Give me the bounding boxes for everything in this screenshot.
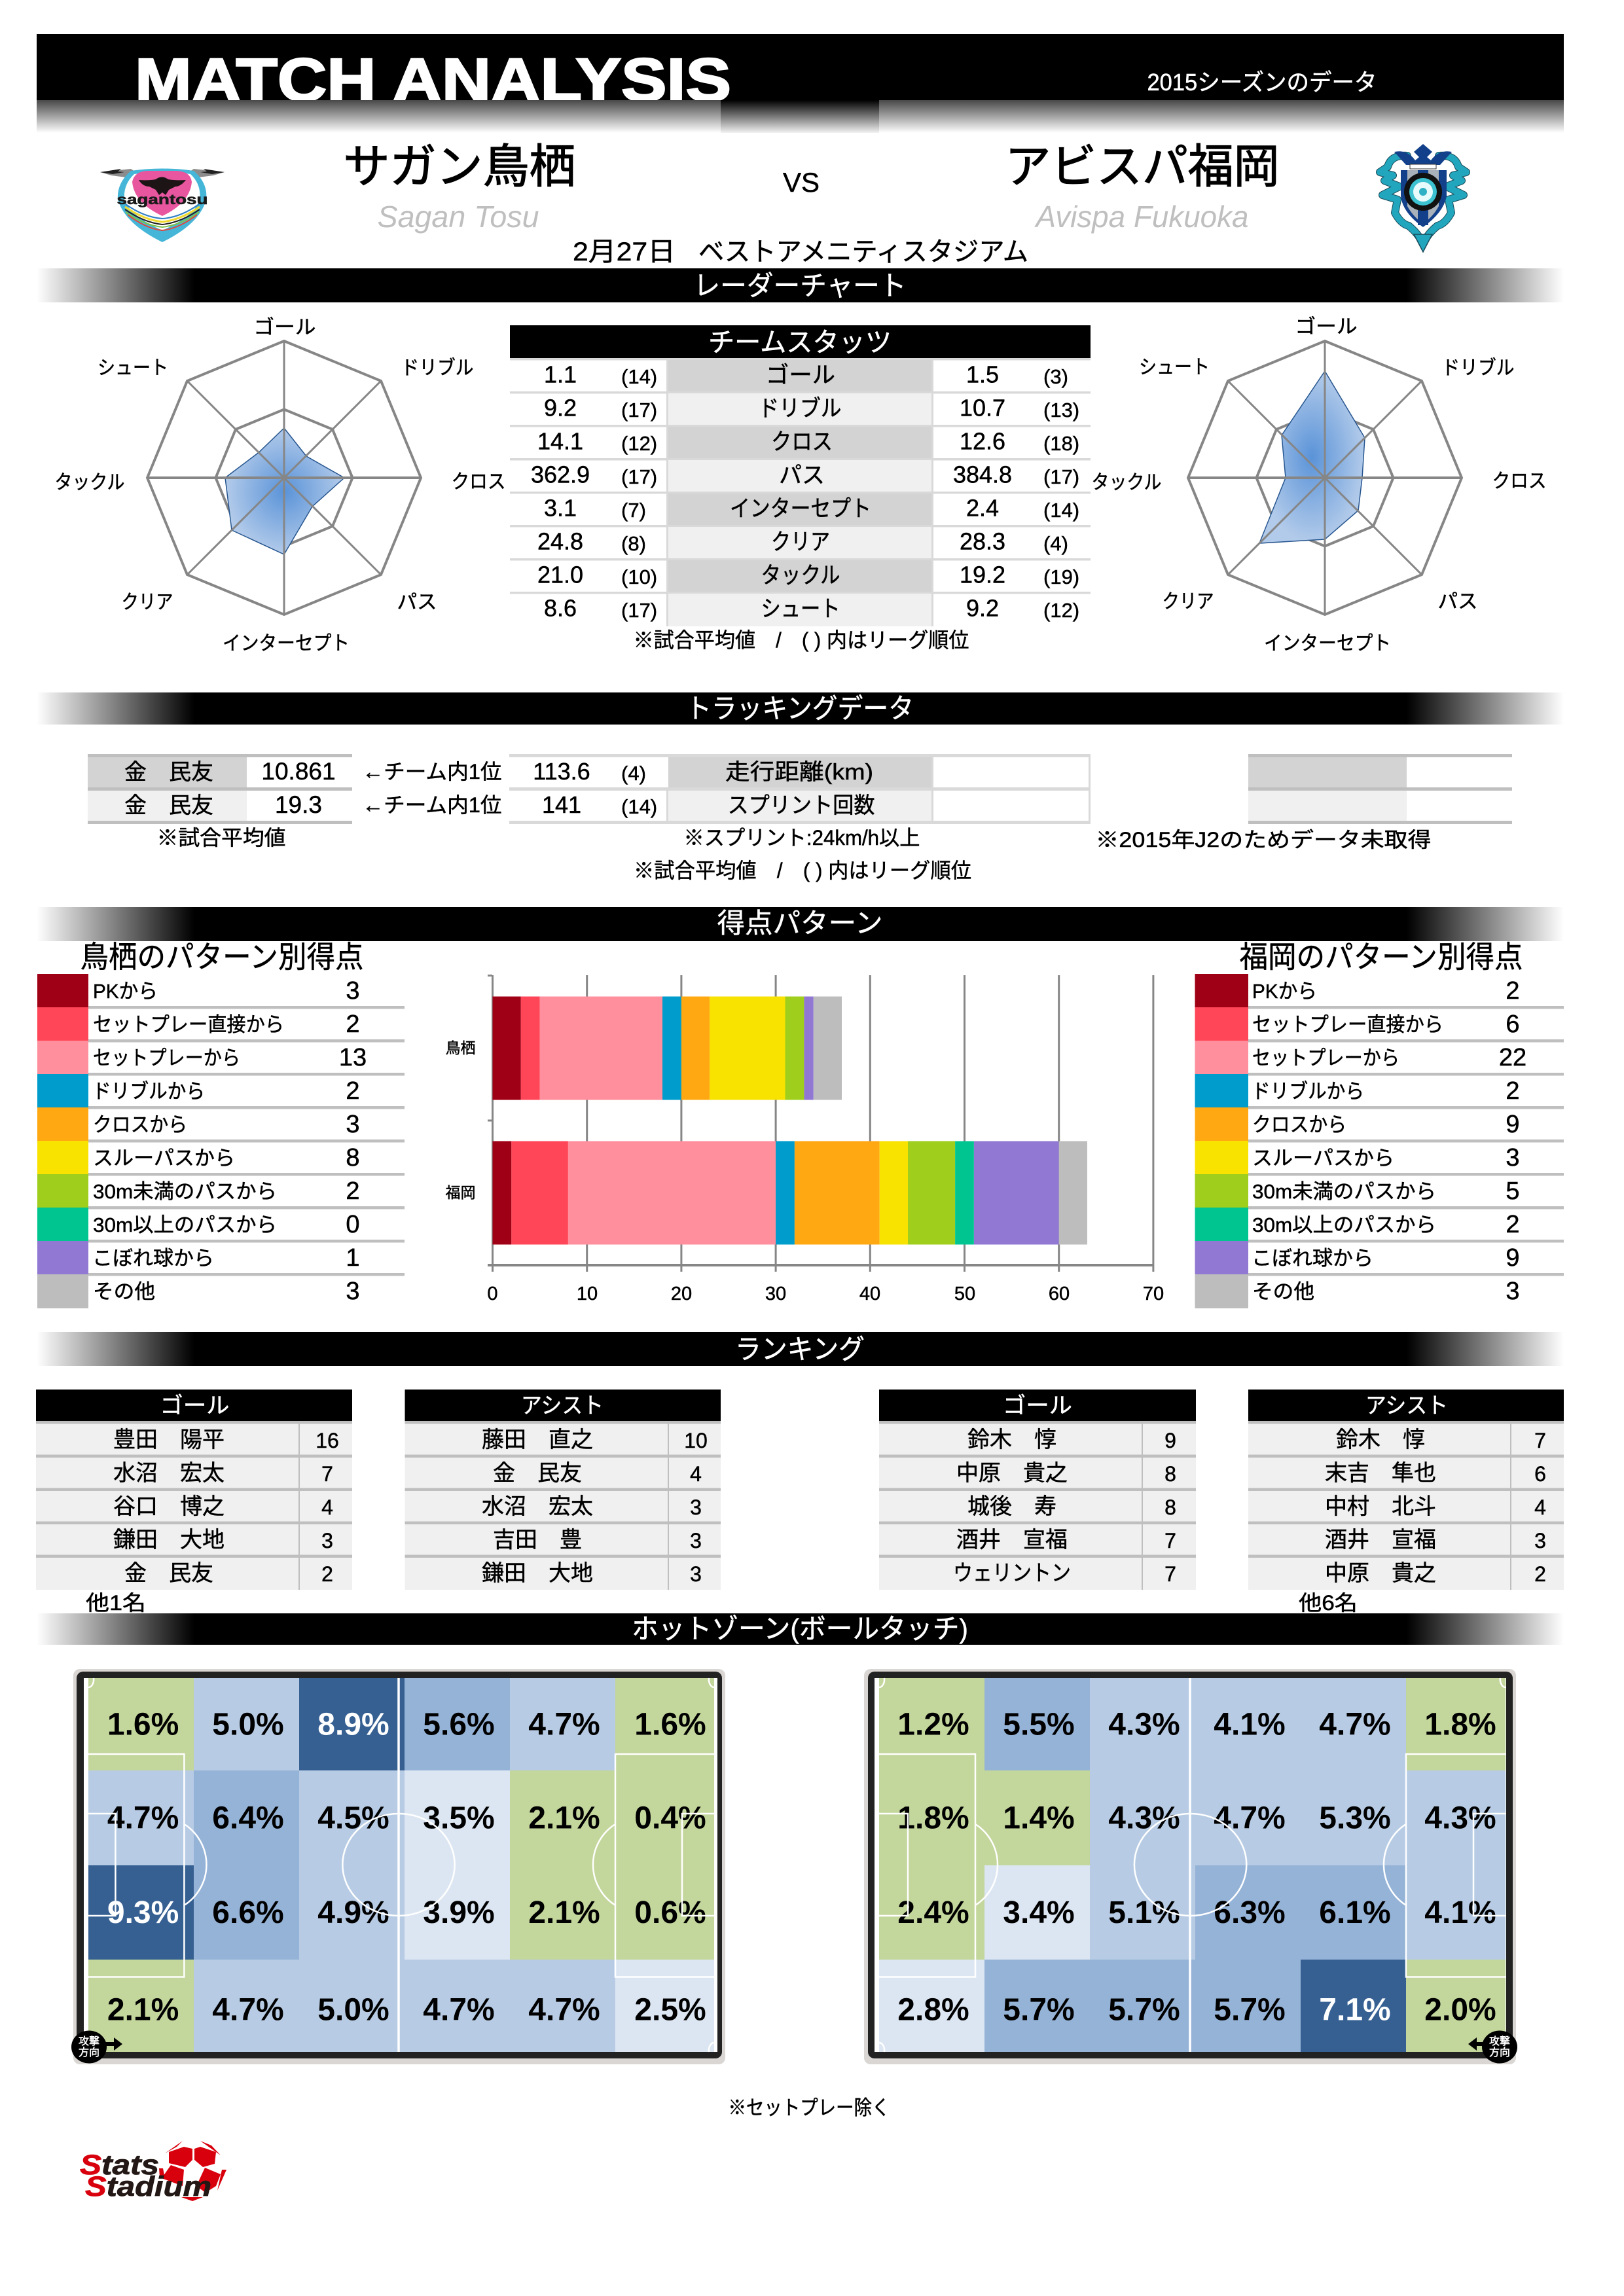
zone percentages: 1.8% xyxy=(897,1801,969,1836)
Fukuoka values: 19.2 xyxy=(960,562,1005,588)
Tosu values: 21.0 xyxy=(537,562,583,588)
legend table: Fukuoka: セットプレーから xyxy=(1252,1047,1399,1069)
zone percentages: 4.7% xyxy=(212,1992,284,2027)
tracking: team table: 141 xyxy=(542,791,581,818)
Fukuoka ranks: (17) xyxy=(1043,465,1079,488)
Fukuoka values: 1.5 xyxy=(966,361,999,387)
ranking table: Fukuoka assists xyxy=(1248,1390,1564,1590)
zone percentages: 4.7% xyxy=(528,1708,600,1742)
team name: Sagan Tosu: サガン鳥栖 xyxy=(343,141,576,193)
legend table: Fukuoka: 6 xyxy=(1506,1011,1520,1038)
ranking table: Fukuoka assists: 酒井 宣福 xyxy=(1325,1528,1436,1552)
legend table: Tosu: 8 xyxy=(346,1144,360,1172)
logo: Stats Stadium xyxy=(80,2141,226,2202)
tracking footnotes: ※2015年J2のためデータ未取得 xyxy=(1096,828,1431,852)
ranking table: Fukuoka goals: 9 xyxy=(1164,1429,1176,1452)
legend table: Fukuoka: 9 xyxy=(1506,1244,1520,1272)
zone percentages: 0.6% xyxy=(634,1895,706,1930)
tracking footnotes: ※スプリント:24km/h以上 xyxy=(683,826,920,850)
legend table: Tosu: 2 xyxy=(346,1177,360,1205)
zone percentages xyxy=(107,1708,706,2027)
legend table: Fukuoka: 30m以上のパスから xyxy=(1252,1213,1436,1236)
legend table: Tosu: セットプレーから xyxy=(93,1047,240,1069)
Fukuoka values: 10.7 xyxy=(960,394,1005,422)
ranking table: Fukuoka assists: 2 xyxy=(1534,1562,1546,1586)
Tosu ranks xyxy=(621,365,657,622)
data polygon xyxy=(1259,371,1365,543)
ranking table: Tosu goals: ゴール xyxy=(160,1393,229,1418)
Tosu ranks: (17) xyxy=(621,465,657,488)
ranking table: Tosu assists: 吉田 豊 xyxy=(493,1528,582,1552)
ranking table: Tosu assists: 藤田 直之 xyxy=(482,1427,593,1452)
zone percentages: 5.5% xyxy=(1003,1708,1075,1742)
Tosu ranks: (17) xyxy=(621,599,657,622)
ranking note: Tosu: 他1名 xyxy=(86,1591,146,1615)
Tosu ranks: (12) xyxy=(621,432,657,455)
bar labels xyxy=(445,1039,475,1201)
ranking table: Fukuoka goals: 8 xyxy=(1164,1462,1176,1486)
x axis labels: 0 xyxy=(487,1283,498,1304)
Fukuoka values: 2.4 xyxy=(966,495,999,521)
zone percentages: 4.7% xyxy=(528,1992,600,2027)
legend table: Tosu: 13 xyxy=(339,1044,367,1071)
Tosu values: 362.9 xyxy=(531,461,590,488)
ranking table: Tosu assists: 3 xyxy=(690,1562,702,1586)
zone percentages: 9.3% xyxy=(107,1895,179,1930)
match date and venue: 2月27日 xyxy=(573,238,676,266)
Fukuoka ranks: (18) xyxy=(1043,432,1079,455)
zone percentages: 4.3% xyxy=(1108,1801,1180,1836)
stat labels: ドリブル xyxy=(758,396,842,422)
hot zone pitch: Tosu xyxy=(71,1669,725,2064)
ranking table: Fukuoka goals: ゴール xyxy=(1003,1393,1072,1418)
zone percentages: 4.9% xyxy=(317,1895,389,1930)
logo: Sagan Tosu xyxy=(100,169,225,242)
team name: Sagan Tosu xyxy=(343,141,576,234)
zone percentages xyxy=(897,1708,1496,2027)
legend table: Tosu: 30m以上のパスから xyxy=(93,1213,277,1236)
legend table: Tosu: 3 xyxy=(346,1111,360,1138)
legend table: Fukuoka: こぼれ球から xyxy=(1252,1247,1373,1270)
Fukuoka values: 9.2 xyxy=(966,594,999,622)
tracking: team table: 113.6 xyxy=(533,758,590,785)
radar axis labels: ゴール xyxy=(254,317,316,338)
Tosu ranks: (14) xyxy=(621,365,657,388)
zone percentages: 4.7% xyxy=(1214,1801,1286,1836)
legend table: Fukuoka: ドリブルから xyxy=(1252,1080,1364,1103)
tracking: Tosu top player table: 19.3 xyxy=(275,791,322,818)
Fukuoka values: 12.6 xyxy=(960,428,1005,454)
attack direction badge xyxy=(71,2030,122,2063)
tracking footnotes: ※試合平均値 xyxy=(157,826,285,850)
tracking: team table: スプリント回数 xyxy=(728,793,875,818)
zone percentages: 5.0% xyxy=(212,1708,284,1742)
Tosu values xyxy=(531,361,590,622)
ranking table: Fukuoka assists: 6 xyxy=(1534,1462,1546,1486)
stat labels: ゴール xyxy=(766,363,835,388)
radar axis labels: ドリブル xyxy=(1441,357,1515,379)
stat labels: クロス xyxy=(771,429,833,455)
tracking: Tosu top player table xyxy=(88,754,352,824)
team stats footnote: ※試合平均値 / ( ) 内はリーグ順位 xyxy=(634,628,969,652)
Fukuoka ranks xyxy=(1043,365,1079,622)
zone percentages: 4.7% xyxy=(1319,1708,1391,1742)
radar axis labels: クロス xyxy=(452,471,505,493)
season label: 2015シーズンのデータ xyxy=(1147,69,1377,96)
x axis labels: 30 xyxy=(765,1283,786,1304)
Tosu ranks: (8) xyxy=(621,532,646,555)
legend table: Fukuoka: 2 xyxy=(1506,1211,1520,1238)
zone percentages: 2.5% xyxy=(634,1992,706,2027)
radar axis labels: パス xyxy=(397,592,437,613)
Fukuoka ranks: (3) xyxy=(1043,365,1068,388)
tracking: team table xyxy=(509,754,1091,824)
zone percentages: 2.1% xyxy=(528,1895,600,1930)
logo: Avispa Fukuoka xyxy=(1380,144,1466,252)
ranking table: Tosu assists xyxy=(405,1390,721,1590)
stat labels xyxy=(730,363,871,622)
legend table: Tosu: PKから xyxy=(93,980,158,1003)
radar axis labels: クリア xyxy=(122,592,173,613)
ranking table: Fukuoka goals: 中原 貴之 xyxy=(956,1461,1068,1486)
radar axis labels: ゴール xyxy=(1295,316,1358,338)
Tosu ranks: (10) xyxy=(621,565,657,588)
ranking table: Fukuoka goals: 城後 寿 xyxy=(967,1494,1056,1519)
ranking table: Tosu goals: 3 xyxy=(321,1529,333,1552)
ranking table: Tosu goals: 水沼 宏太 xyxy=(113,1461,225,1486)
zone percentages: 5.7% xyxy=(1214,1992,1286,2027)
tracking: Tosu top player table: 10.861 xyxy=(261,758,336,785)
radar chart: Fukuoka xyxy=(1092,316,1546,655)
bar labels: 福岡 xyxy=(445,1184,475,1201)
bar: Tosu xyxy=(492,996,842,1100)
legend table: Tosu: 0 xyxy=(346,1211,360,1238)
tracking: team rank notes: ←チーム内1位 xyxy=(363,760,501,783)
Tosu values: 8.6 xyxy=(544,594,577,622)
attack direction badge: 方向 xyxy=(1489,2047,1510,2058)
tracking footnotes: ※試合平均値 / ( ) 内はリーグ順位 xyxy=(634,859,971,882)
ranking table: Tosu goals: 谷口 博之 xyxy=(113,1494,225,1519)
legend table: Fukuoka: 2 xyxy=(1506,1077,1520,1105)
radar axis labels: シュート xyxy=(98,357,168,379)
tracking: team table: (4) xyxy=(621,762,646,785)
ranking table: Tosu goals: 16 xyxy=(316,1429,339,1452)
tracking: team table: (14) xyxy=(621,795,657,818)
legend table: Tosu: 2 xyxy=(346,1011,360,1038)
Tosu ranks: (7) xyxy=(621,499,646,522)
tracking: team table: 走行距離(km) xyxy=(725,760,873,785)
ranking table: Fukuoka assists: 中原 貴之 xyxy=(1325,1561,1436,1586)
x axis labels: 70 xyxy=(1143,1283,1164,1304)
ranking table: Fukuoka goals: 酒井 宣福 xyxy=(956,1528,1068,1552)
zone percentages: 2.8% xyxy=(897,1992,969,2027)
zone percentages: 4.3% xyxy=(1424,1801,1496,1836)
legend table: Fukuoka: スルーパスから xyxy=(1252,1147,1394,1170)
zone percentages: 4.5% xyxy=(317,1801,389,1836)
radar chart: Tosu xyxy=(55,317,505,655)
ranking table: Tosu assists: 4 xyxy=(690,1462,702,1486)
zone percentages: 5.6% xyxy=(423,1708,495,1742)
legend table: Fukuoka: その他 xyxy=(1252,1280,1314,1303)
zone percentages: 2.1% xyxy=(107,1992,179,2027)
tracking: Fukuoka empty table xyxy=(1248,754,1512,824)
zone percentages: 6.1% xyxy=(1319,1895,1391,1930)
zone percentages: 6.6% xyxy=(212,1895,284,1930)
zone percentages: 3.4% xyxy=(1003,1895,1075,1930)
Fukuoka values xyxy=(953,361,1012,622)
zone percentages: 1.4% xyxy=(1003,1801,1075,1836)
ranking table: Fukuoka goals: 鈴木 惇 xyxy=(967,1427,1056,1452)
ranking note: Fukuoka: 他6名 xyxy=(1299,1591,1358,1615)
Tosu ranks: (17) xyxy=(621,399,657,422)
zone percentages: 5.7% xyxy=(1108,1992,1180,2027)
Fukuoka ranks: (4) xyxy=(1043,532,1068,555)
bar labels: 鳥栖 xyxy=(445,1039,475,1056)
ranking table: Fukuoka assists: アシスト xyxy=(1365,1393,1448,1418)
team stats table xyxy=(510,325,1091,626)
legend table: Fukuoka: 30m未満のパスから xyxy=(1252,1180,1436,1203)
ranking table: Fukuoka assists: 4 xyxy=(1534,1496,1546,1519)
bar: Fukuoka xyxy=(492,1141,1087,1245)
ranking table: Tosu assists: 3 xyxy=(690,1496,702,1519)
stacked bar chart: scoring patterns xyxy=(445,975,1164,1304)
legend table: Fukuoka: PKから xyxy=(1252,980,1317,1003)
ranking table: Tosu goals: 鎌田 大地 xyxy=(113,1528,225,1552)
Fukuoka ranks: (12) xyxy=(1043,599,1079,622)
hot zone footnote: ※セットプレー除く xyxy=(728,2096,890,2119)
radar axis labels: インターセプト xyxy=(223,633,350,655)
legend table: Fukuoka: セットプレー直接から xyxy=(1252,1013,1443,1036)
legend table: Tosu: 2 xyxy=(346,1077,360,1105)
legend table: Tosu: その他 xyxy=(93,1280,155,1303)
Fukuoka ranks: (19) xyxy=(1043,565,1079,588)
ranking table: Fukuoka assists: 3 xyxy=(1534,1529,1546,1552)
stat labels: タックル xyxy=(761,563,840,588)
attack direction badge: 攻撃 xyxy=(79,2036,99,2047)
ranking table: Fukuoka goals xyxy=(879,1390,1196,1590)
section heading: tracking data xyxy=(37,692,1564,725)
section heading: scoring patterns xyxy=(37,907,1564,941)
title: MATCH ANALYSIS xyxy=(135,46,731,114)
table heading: チームスタッツ xyxy=(708,327,892,357)
legend table: Fukuoka: 22 xyxy=(1499,1044,1526,1071)
radar axis labels: ドリブル xyxy=(401,357,474,379)
ranking table: Tosu assists: 10 xyxy=(684,1429,708,1452)
ranking table: Fukuoka goals: 7 xyxy=(1164,1562,1176,1586)
ranking table: Fukuoka assists: 鈴木 惇 xyxy=(1336,1427,1425,1452)
Fukuoka ranks: (13) xyxy=(1043,399,1079,422)
section heading: radar chart: レーダーチャート xyxy=(694,270,906,301)
stat labels: インターセプト xyxy=(730,496,871,522)
team name latin: Avispa Fukuoka: Avispa Fukuoka xyxy=(1034,200,1249,234)
zone percentages: 7.1% xyxy=(1319,1992,1391,2027)
zone percentages: 1.6% xyxy=(634,1708,706,1742)
section heading: radar chart xyxy=(37,268,1564,302)
x axis labels: 40 xyxy=(859,1283,880,1304)
Tosu values: 14.1 xyxy=(537,428,583,454)
x axis labels: 20 xyxy=(671,1283,692,1304)
attack direction badge xyxy=(1468,2030,1517,2063)
ranking table: Tosu goals: 2 xyxy=(321,1562,333,1586)
ranking table: Tosu goals: 豊田 陽平 xyxy=(113,1427,225,1452)
team name: Avispa Fukuoka xyxy=(1005,141,1279,234)
legend table: Fukuoka: 5 xyxy=(1506,1177,1520,1205)
ranking table: Fukuoka assists: 末吉 隼也 xyxy=(1325,1461,1436,1486)
tracking footnotes xyxy=(157,826,1431,882)
zone percentages: 2.4% xyxy=(897,1895,969,1930)
radar axis labels: タックル xyxy=(1092,472,1161,493)
legend table: Tosu: クロスから xyxy=(93,1113,187,1136)
x axis labels: 10 xyxy=(577,1283,598,1304)
Fukuoka values: 384.8 xyxy=(953,461,1012,488)
legend table: Tosu: 3 xyxy=(346,977,360,1005)
legend heading: Tosu: 鳥栖のパターン別得点 xyxy=(80,940,364,974)
legend table: Fukuoka: 9 xyxy=(1506,1111,1520,1138)
zone percentages: 5.1% xyxy=(1108,1895,1180,1930)
legend table: Tosu xyxy=(37,974,405,1308)
header banner xyxy=(37,34,1564,133)
hot zone pitch: Fukuoka xyxy=(864,1669,1517,2064)
zone percentages: 4.7% xyxy=(107,1801,179,1836)
team name latin: Sagan Tosu: Sagan Tosu xyxy=(377,200,539,234)
logo: Stats Stadium: Stats xyxy=(80,2149,159,2181)
logo: Sagan Tosu: sagantosu xyxy=(117,192,208,207)
ranking table: Tosu goals: 4 xyxy=(321,1496,333,1519)
zone percentages: 4.1% xyxy=(1424,1895,1496,1930)
legend table: Tosu: 3 xyxy=(346,1278,360,1305)
section heading: hot zone xyxy=(37,1613,1564,1645)
tracking: team rank notes xyxy=(363,760,501,817)
section heading: ranking xyxy=(37,1332,1564,1366)
ranking table: Tosu goals: 金 民友 xyxy=(124,1561,213,1586)
zone percentages: 4.7% xyxy=(423,1992,495,2027)
zone percentages: 4.1% xyxy=(1214,1708,1286,1742)
radar axis labels xyxy=(55,317,505,655)
legend table: Fukuoka: クロスから xyxy=(1252,1113,1346,1136)
radar axis labels: タックル xyxy=(55,472,124,493)
radar axis labels: パス xyxy=(1437,591,1478,613)
legend table: Tosu: 30m未満のパスから xyxy=(93,1180,277,1203)
zone percentages: 2.0% xyxy=(1424,1992,1496,2027)
legend table: Fukuoka: 3 xyxy=(1506,1278,1520,1305)
zone percentages: 8.9% xyxy=(317,1708,389,1742)
radar axis labels: クロス xyxy=(1492,471,1546,492)
legend table: Fukuoka xyxy=(1195,974,1564,1308)
legend table: Tosu: 1 xyxy=(346,1244,360,1272)
legend table: Tosu: セットプレー直接から xyxy=(93,1013,284,1036)
x axis labels xyxy=(487,1283,1164,1304)
zone percentages: 3.5% xyxy=(423,1801,495,1836)
ranking table: Fukuoka assists: 中村 北斗 xyxy=(1325,1494,1436,1519)
stat labels: パス xyxy=(779,463,825,488)
zone percentages: 6.4% xyxy=(212,1801,284,1836)
zone percentages: 5.7% xyxy=(1003,1992,1075,2027)
ranking table: Tosu assists: アシスト xyxy=(521,1393,604,1418)
ranking table: Fukuoka goals: 7 xyxy=(1164,1529,1176,1552)
zone percentages: 1.6% xyxy=(107,1708,179,1742)
zone percentages: 1.8% xyxy=(1424,1708,1496,1742)
tracking: Tosu top player table: 金 民友 xyxy=(124,793,213,818)
legend table: Tosu: スルーパスから xyxy=(93,1147,235,1170)
attack direction badge: 方向 xyxy=(79,2047,99,2058)
section heading: scoring patterns: 得点パターン xyxy=(717,908,882,939)
Tosu values: 9.2 xyxy=(544,394,577,422)
tracking: team rank notes: ←チーム内1位 xyxy=(363,793,501,817)
Tosu values: 1.1 xyxy=(544,361,577,387)
ranking table: Fukuoka goals: 8 xyxy=(1164,1496,1176,1519)
Tosu values: 3.1 xyxy=(544,495,577,521)
radar axis labels: クリア xyxy=(1163,591,1214,613)
ranking table: Fukuoka goals: ウェリントン xyxy=(953,1561,1071,1586)
zone percentages: 2.1% xyxy=(528,1801,600,1836)
legend heading: Fukuoka: 福岡のパターン別得点 xyxy=(1240,940,1523,974)
zone percentages: 5.3% xyxy=(1319,1801,1391,1836)
radar axis labels: インターセプト xyxy=(1264,633,1391,655)
zone percentages: 0.4% xyxy=(634,1801,706,1836)
radar axis labels: シュート xyxy=(1139,357,1210,378)
legend table: Fukuoka: 2 xyxy=(1506,977,1520,1005)
zone percentages: 3.9% xyxy=(423,1895,495,1930)
data polygon xyxy=(225,428,344,554)
stat labels: クリア xyxy=(771,529,830,555)
legend table: Fukuoka: 3 xyxy=(1506,1144,1520,1172)
radar axis labels xyxy=(1092,316,1546,655)
legend table: Tosu: ドリブルから xyxy=(92,1080,205,1103)
tracking: Tosu top player table: 金 民友 xyxy=(124,760,213,785)
ranking table: Fukuoka assists: 7 xyxy=(1534,1429,1546,1452)
logo: Stats Stadium: Stadium xyxy=(85,2171,211,2202)
zone percentages: 5.0% xyxy=(317,1992,389,2027)
stat labels: シュート xyxy=(761,596,840,622)
zone percentages: 4.3% xyxy=(1108,1708,1180,1742)
zone percentages: 1.2% xyxy=(897,1708,969,1742)
Fukuoka ranks: (14) xyxy=(1043,499,1079,522)
x axis labels: 50 xyxy=(954,1283,975,1304)
attack direction badge: 攻撃 xyxy=(1489,2036,1510,2047)
ranking table: Tosu goals xyxy=(36,1390,352,1590)
legend table: Tosu: こぼれ球から xyxy=(92,1247,214,1270)
section heading: hot zone: ホットゾーン(ボールタッチ) xyxy=(632,1613,968,1644)
zone percentages: 6.3% xyxy=(1214,1895,1286,1930)
ranking table: Tosu assists: 水沼 宏太 xyxy=(482,1494,593,1519)
section heading: ranking: ランキング xyxy=(735,1334,865,1365)
Fukuoka values: 28.3 xyxy=(960,528,1005,555)
ranking table: Tosu assists: 3 xyxy=(690,1529,702,1552)
x axis labels: 60 xyxy=(1049,1283,1070,1304)
ranking table: Tosu assists: 金 民友 xyxy=(493,1461,582,1486)
team name: Avispa Fukuoka: アビスパ福岡 xyxy=(1005,141,1279,193)
section heading: tracking data: トラッキングデータ xyxy=(686,693,914,724)
Tosu values: 24.8 xyxy=(537,528,583,555)
ranking table: Tosu goals: 7 xyxy=(321,1462,333,1486)
ranking table: Tosu assists: 鎌田 大地 xyxy=(482,1561,593,1586)
match date and venue: ベストアメニティスタジアム xyxy=(698,238,1028,266)
vs label: VS xyxy=(783,167,820,198)
